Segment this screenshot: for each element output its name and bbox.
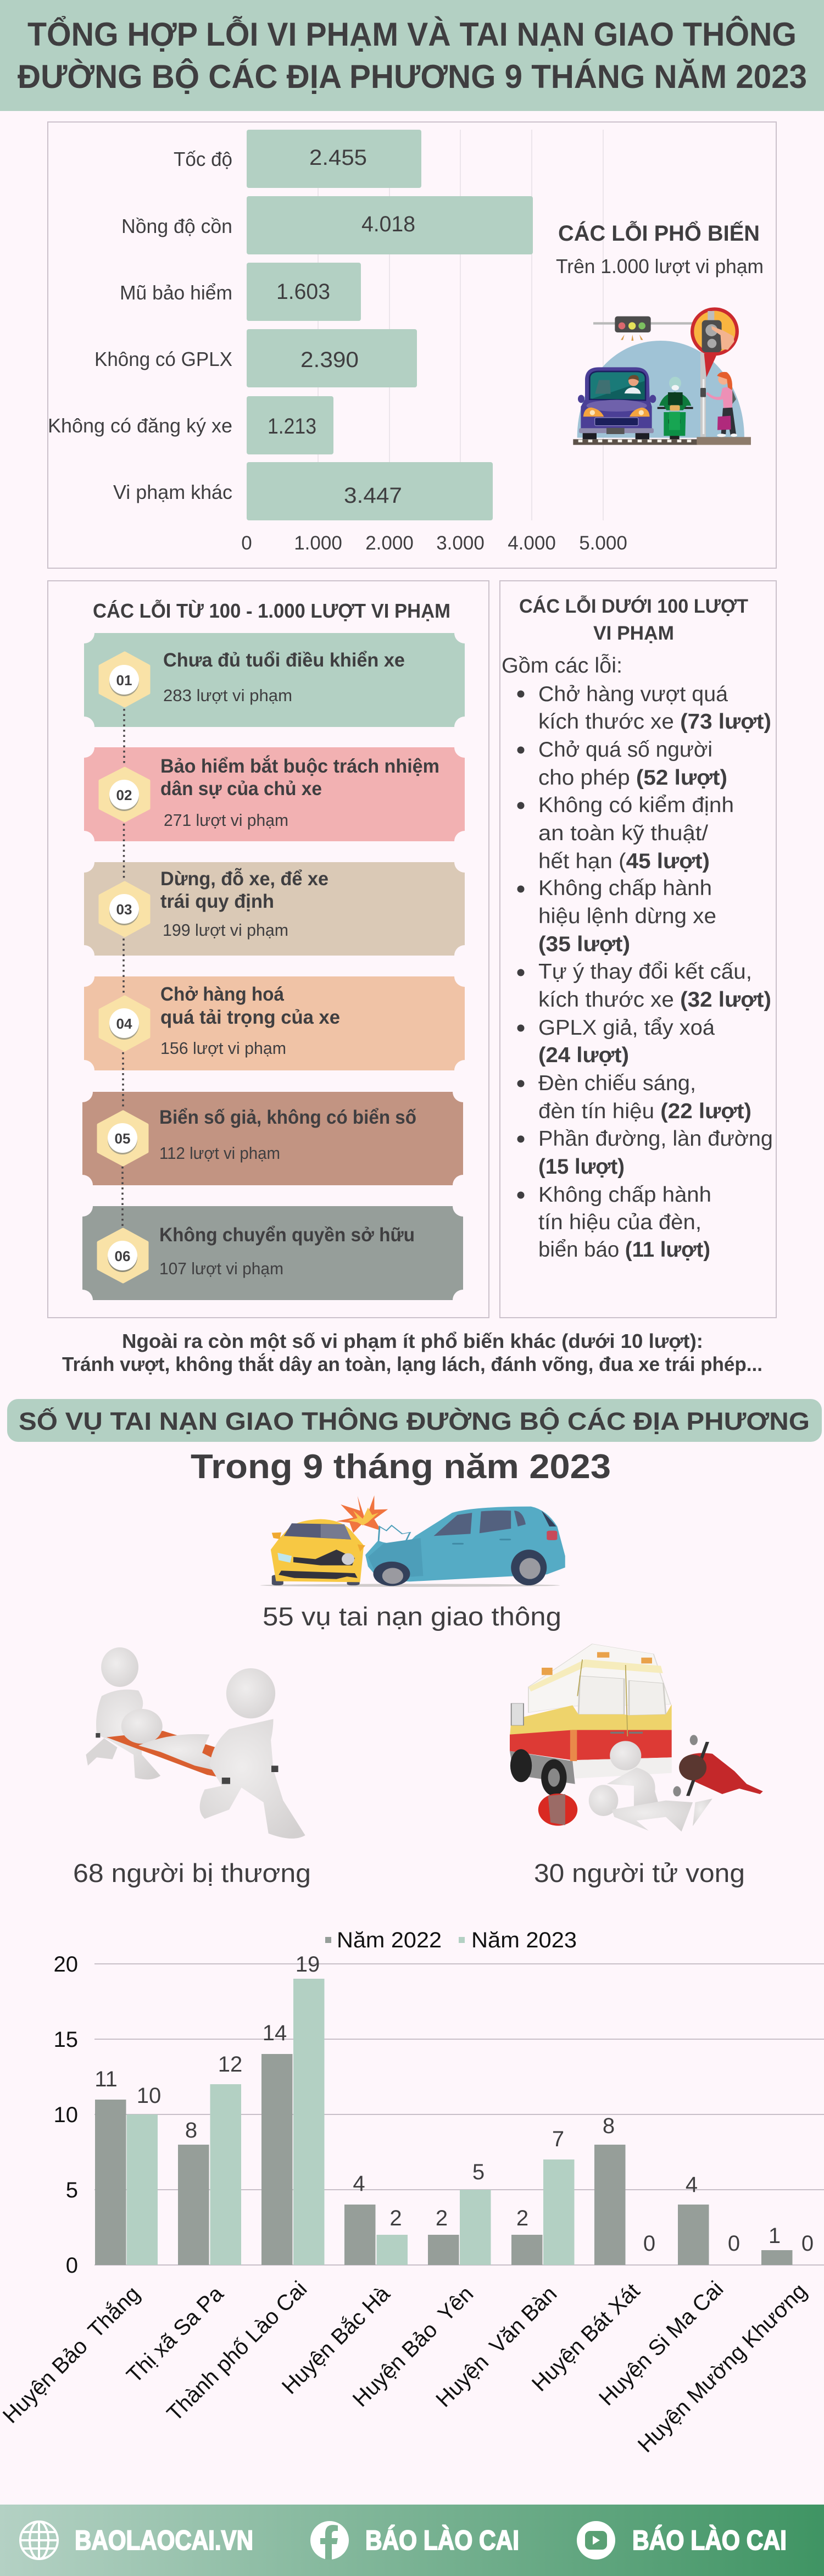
list of violations: an toàn kỹ thuật/	[538, 821, 708, 845]
item 02	[84, 747, 465, 841]
chart: accidents by locality: Huyện Mường Khương	[633, 2279, 811, 2457]
chart: accidents by locality: 8	[603, 2114, 615, 2138]
item 03	[84, 862, 465, 956]
chart: accidents by locality	[0, 1928, 824, 2457]
chart: accidents by locality: 20	[54, 1952, 78, 1977]
item 05: Biển số giả, không có biển số	[159, 1107, 416, 1128]
chart: accidents by locality: 11	[94, 2067, 118, 2091]
stat: 55 accidents: 55 vụ tai nạn giao thông	[263, 1602, 561, 1631]
chart: accidents by locality: 10	[54, 2103, 78, 2127]
chart: accidents by locality: 2	[389, 2206, 402, 2230]
horizontal bar chart: 4.018	[361, 212, 415, 236]
chart legend	[325, 1928, 577, 1952]
item 03: trái quy định	[160, 891, 274, 912]
chart: accidents by locality: 0	[801, 2231, 814, 2256]
link: facebook: BÁO LÀO CAI	[365, 2525, 519, 2556]
horizontal bar chart: Nồng độ cồn	[121, 215, 232, 237]
horizontal bar chart: 2.455	[309, 146, 367, 170]
item 01	[84, 633, 465, 727]
horizontal bar chart: 0	[241, 532, 252, 554]
horizontal bar chart: 2.390	[300, 348, 359, 372]
item 01: 01	[116, 672, 132, 689]
horizontal bar chart: 1.603	[276, 280, 330, 304]
list of violations: Không chấp hành	[538, 876, 712, 900]
horizontal bar chart: 4.000	[508, 532, 556, 554]
list of violations: hết hạn (45 lượt)	[538, 850, 710, 873]
icon: ambulance accident	[510, 1644, 763, 1831]
item 04	[84, 976, 465, 1070]
chart: accidents by locality: 7	[552, 2127, 564, 2151]
chart: accidents by locality: 19	[296, 1952, 320, 1977]
chart: accidents by locality: Thị xã Sa Pa	[122, 2281, 229, 2388]
heading: under 100 violations: CÁC LỖI DƯỚI 100 LƯỢT	[519, 595, 748, 617]
stat: 30 deaths: 30 người tử vong	[534, 1858, 745, 1887]
list of violations: biển báo (11 lượt)	[538, 1238, 710, 1262]
list of violations: cho phép (52 lượt)	[538, 766, 727, 790]
chart: accidents by locality: Thành phố Lào Cai	[163, 2277, 311, 2426]
icon: car crash	[260, 1495, 565, 1587]
title banner: ĐƯỜNG BỘ CÁC ĐỊA PHƯƠNG 9 THÁNG NĂM 2023	[18, 58, 807, 95]
item 04: quá tải trọng của xe	[160, 1007, 340, 1028]
list of violations: kích thước xe (32 lượt)	[538, 988, 771, 1012]
list of violations: Phần đường, làn đường	[538, 1127, 773, 1151]
chart: accidents by locality: 0	[66, 2253, 78, 2278]
section banner: accidents: SỐ VỤ TAI NẠN GIAO THÔNG ĐƯỜNG BỘ CÁC ĐỊA PHƯƠNG	[19, 1407, 810, 1435]
panel: common violations	[48, 122, 776, 568]
item 02: 271 lượt vi phạm	[164, 810, 288, 830]
item 01: Chưa đủ tuổi điều khiển xe	[163, 649, 405, 671]
item 06	[82, 1206, 463, 1300]
horizontal bar chart: Không có GPLX	[94, 348, 232, 370]
heading: 100-1000 violations: CÁC LỖI TỪ 100 - 1.000 LƯỢT VI PHẠM	[93, 599, 450, 622]
horizontal bar chart: 2.000	[365, 532, 414, 554]
list of violations: Đèn chiếu sáng,	[538, 1072, 696, 1095]
chart: accidents by locality: 0	[728, 2231, 740, 2256]
list of violations: (15 lượt)	[538, 1155, 625, 1179]
item 04: Chở hàng hoá	[160, 984, 284, 1005]
list of violations: (24 lượt)	[538, 1043, 629, 1067]
item 02: Bảo hiểm bắt buộc trách nhiệm	[160, 755, 439, 777]
item 05	[82, 1092, 463, 1185]
item 03: 199 lượt vi phạm	[163, 920, 288, 940]
item 05: 05	[115, 1130, 130, 1147]
horizontal bar chart: 5.000	[579, 532, 627, 554]
list of violations	[502, 654, 773, 1262]
heading: in 9 months: Trong 9 tháng năm 2023	[191, 1448, 611, 1486]
icon: facebook	[310, 2521, 349, 2560]
item 06: 107 lượt vi phạm	[159, 1259, 283, 1278]
title banner: TỔNG HỢP LỖI VI PHẠM VÀ TAI NẠN GIAO THÔNG	[27, 16, 797, 53]
chart: accidents by locality: 5	[472, 2160, 485, 2184]
heading: under 100 violations	[519, 595, 748, 644]
chart: accidents by locality: 12	[218, 2052, 242, 2077]
horizontal bar chart: 1.000	[294, 532, 342, 554]
list of violations: đèn tín hiệu (22 lượt)	[538, 1100, 751, 1123]
list of violations: kích thước xe (73 lượt)	[538, 710, 771, 734]
chart: accidents by locality: 10	[137, 2084, 161, 2108]
chart: accidents by locality: Huyện Văn Bàn	[431, 2281, 561, 2412]
horizontal bar chart: Mũ bảo hiểm	[120, 281, 232, 304]
list of violations: (35 lượt)	[538, 932, 630, 956]
chart legend: Năm 2022	[337, 1928, 442, 1952]
chart: accidents by locality: 1	[769, 2224, 781, 2248]
horizontal bar chart: Không có đăng ký xe	[48, 414, 232, 437]
section banner: accidents	[7, 1399, 822, 1442]
item 02: dân sự của chủ xe	[160, 778, 322, 800]
chart: accidents by locality: Huyện Bảo Thắng	[0, 2281, 144, 2428]
chart: accidents by locality: 4	[686, 2173, 698, 2197]
item 03: Dừng, đỗ xe, để xe	[160, 868, 329, 890]
list of violations: Gồm các lỗi:	[502, 654, 622, 678]
horizontal bar chart: 3.000	[436, 532, 485, 554]
horizontal bar chart	[48, 130, 627, 554]
chart: accidents by locality: 8	[185, 2118, 197, 2142]
chart: accidents by locality: 2	[436, 2206, 448, 2230]
item 04: 04	[116, 1015, 132, 1032]
list of violations: hiệu lệnh dừng xe	[538, 904, 716, 928]
horizontal bar chart: Tốc độ	[174, 148, 232, 170]
chart: accidents by locality: 2	[516, 2206, 528, 2230]
item 03: 03	[116, 901, 132, 918]
icon: traffic scene	[573, 307, 751, 445]
item 05: 112 lượt vi phạm	[159, 1143, 280, 1163]
list of violations: Tự ý thay đổi kết cấu,	[538, 960, 752, 984]
note: other violations	[62, 1330, 762, 1375]
list of violations: GPLX giả, tẩy xoá	[538, 1016, 715, 1040]
note: other violations: Tránh vượt, không thắt dây an toàn, lạng lách, đánh võng, đua xe trái phép...	[62, 1352, 762, 1375]
chart: accidents by locality: 0	[643, 2231, 655, 2256]
list of violations: Chở quá số người	[538, 738, 712, 762]
horizontal bar chart: 1.213	[268, 414, 316, 438]
stat: 68 injured: 68 người bị thương	[73, 1858, 311, 1887]
note: other violations: Ngoài ra còn một số vi phạm ít phổ biến khác (dưới 10 lượt):	[122, 1330, 703, 1352]
subheading: over 1000: Trên 1.000 lượt vi phạm	[556, 255, 764, 277]
list of violations: tín hiệu của đèn,	[538, 1211, 701, 1234]
title banner	[0, 0, 824, 111]
panel: 100-1000 violations	[48, 581, 489, 1318]
chart: accidents by locality: 4	[353, 2172, 365, 2196]
horizontal bar chart: 3.447	[344, 484, 402, 508]
chart: accidents by locality: 15	[54, 2028, 78, 2052]
item 01: 283 lượt vi phạm	[163, 686, 292, 705]
chart: accidents by locality: Huyện Bắc Hà	[277, 2281, 395, 2399]
list of violations: Chở hàng vượt quá	[538, 682, 728, 706]
chart: accidents by locality: Huyện Si Ma Cai	[594, 2277, 728, 2411]
chart: accidents by locality: Huyện Bát Xát	[527, 2279, 644, 2396]
list of violations: Không có kiểm định	[538, 793, 734, 817]
link: website: BAOLAOCAI.VN	[75, 2525, 253, 2556]
chart: accidents by locality: Huyện Bảo Yên	[348, 2281, 478, 2412]
item 04: 156 lượt vi phạm	[160, 1039, 286, 1058]
item 02: 02	[116, 787, 132, 803]
item 06: 06	[115, 1248, 130, 1264]
icon: stretcher bearers	[86, 1647, 305, 1839]
chart: accidents by locality: 5	[66, 2178, 78, 2202]
horizontal bar chart: Vi phạm khác	[113, 481, 232, 503]
icon: globe	[20, 2522, 58, 2559]
panel: under 100 violations	[500, 581, 776, 1318]
footer bar	[0, 2505, 824, 2576]
link: youtube: BÁO LÀO CAI	[632, 2525, 787, 2556]
heading: under 100 violations: VI PHẠM	[593, 623, 674, 644]
icon: youtube	[577, 2521, 615, 2560]
chart: accidents by locality: 14	[263, 2021, 287, 2045]
list of violations: Không chấp hành	[538, 1183, 711, 1207]
chart legend: Năm 2023	[471, 1928, 577, 1952]
item 06: Không chuyển quyền sở hữu	[159, 1224, 415, 1246]
heading: common violations: CÁC LỖI PHỔ BIẾN	[558, 220, 760, 246]
